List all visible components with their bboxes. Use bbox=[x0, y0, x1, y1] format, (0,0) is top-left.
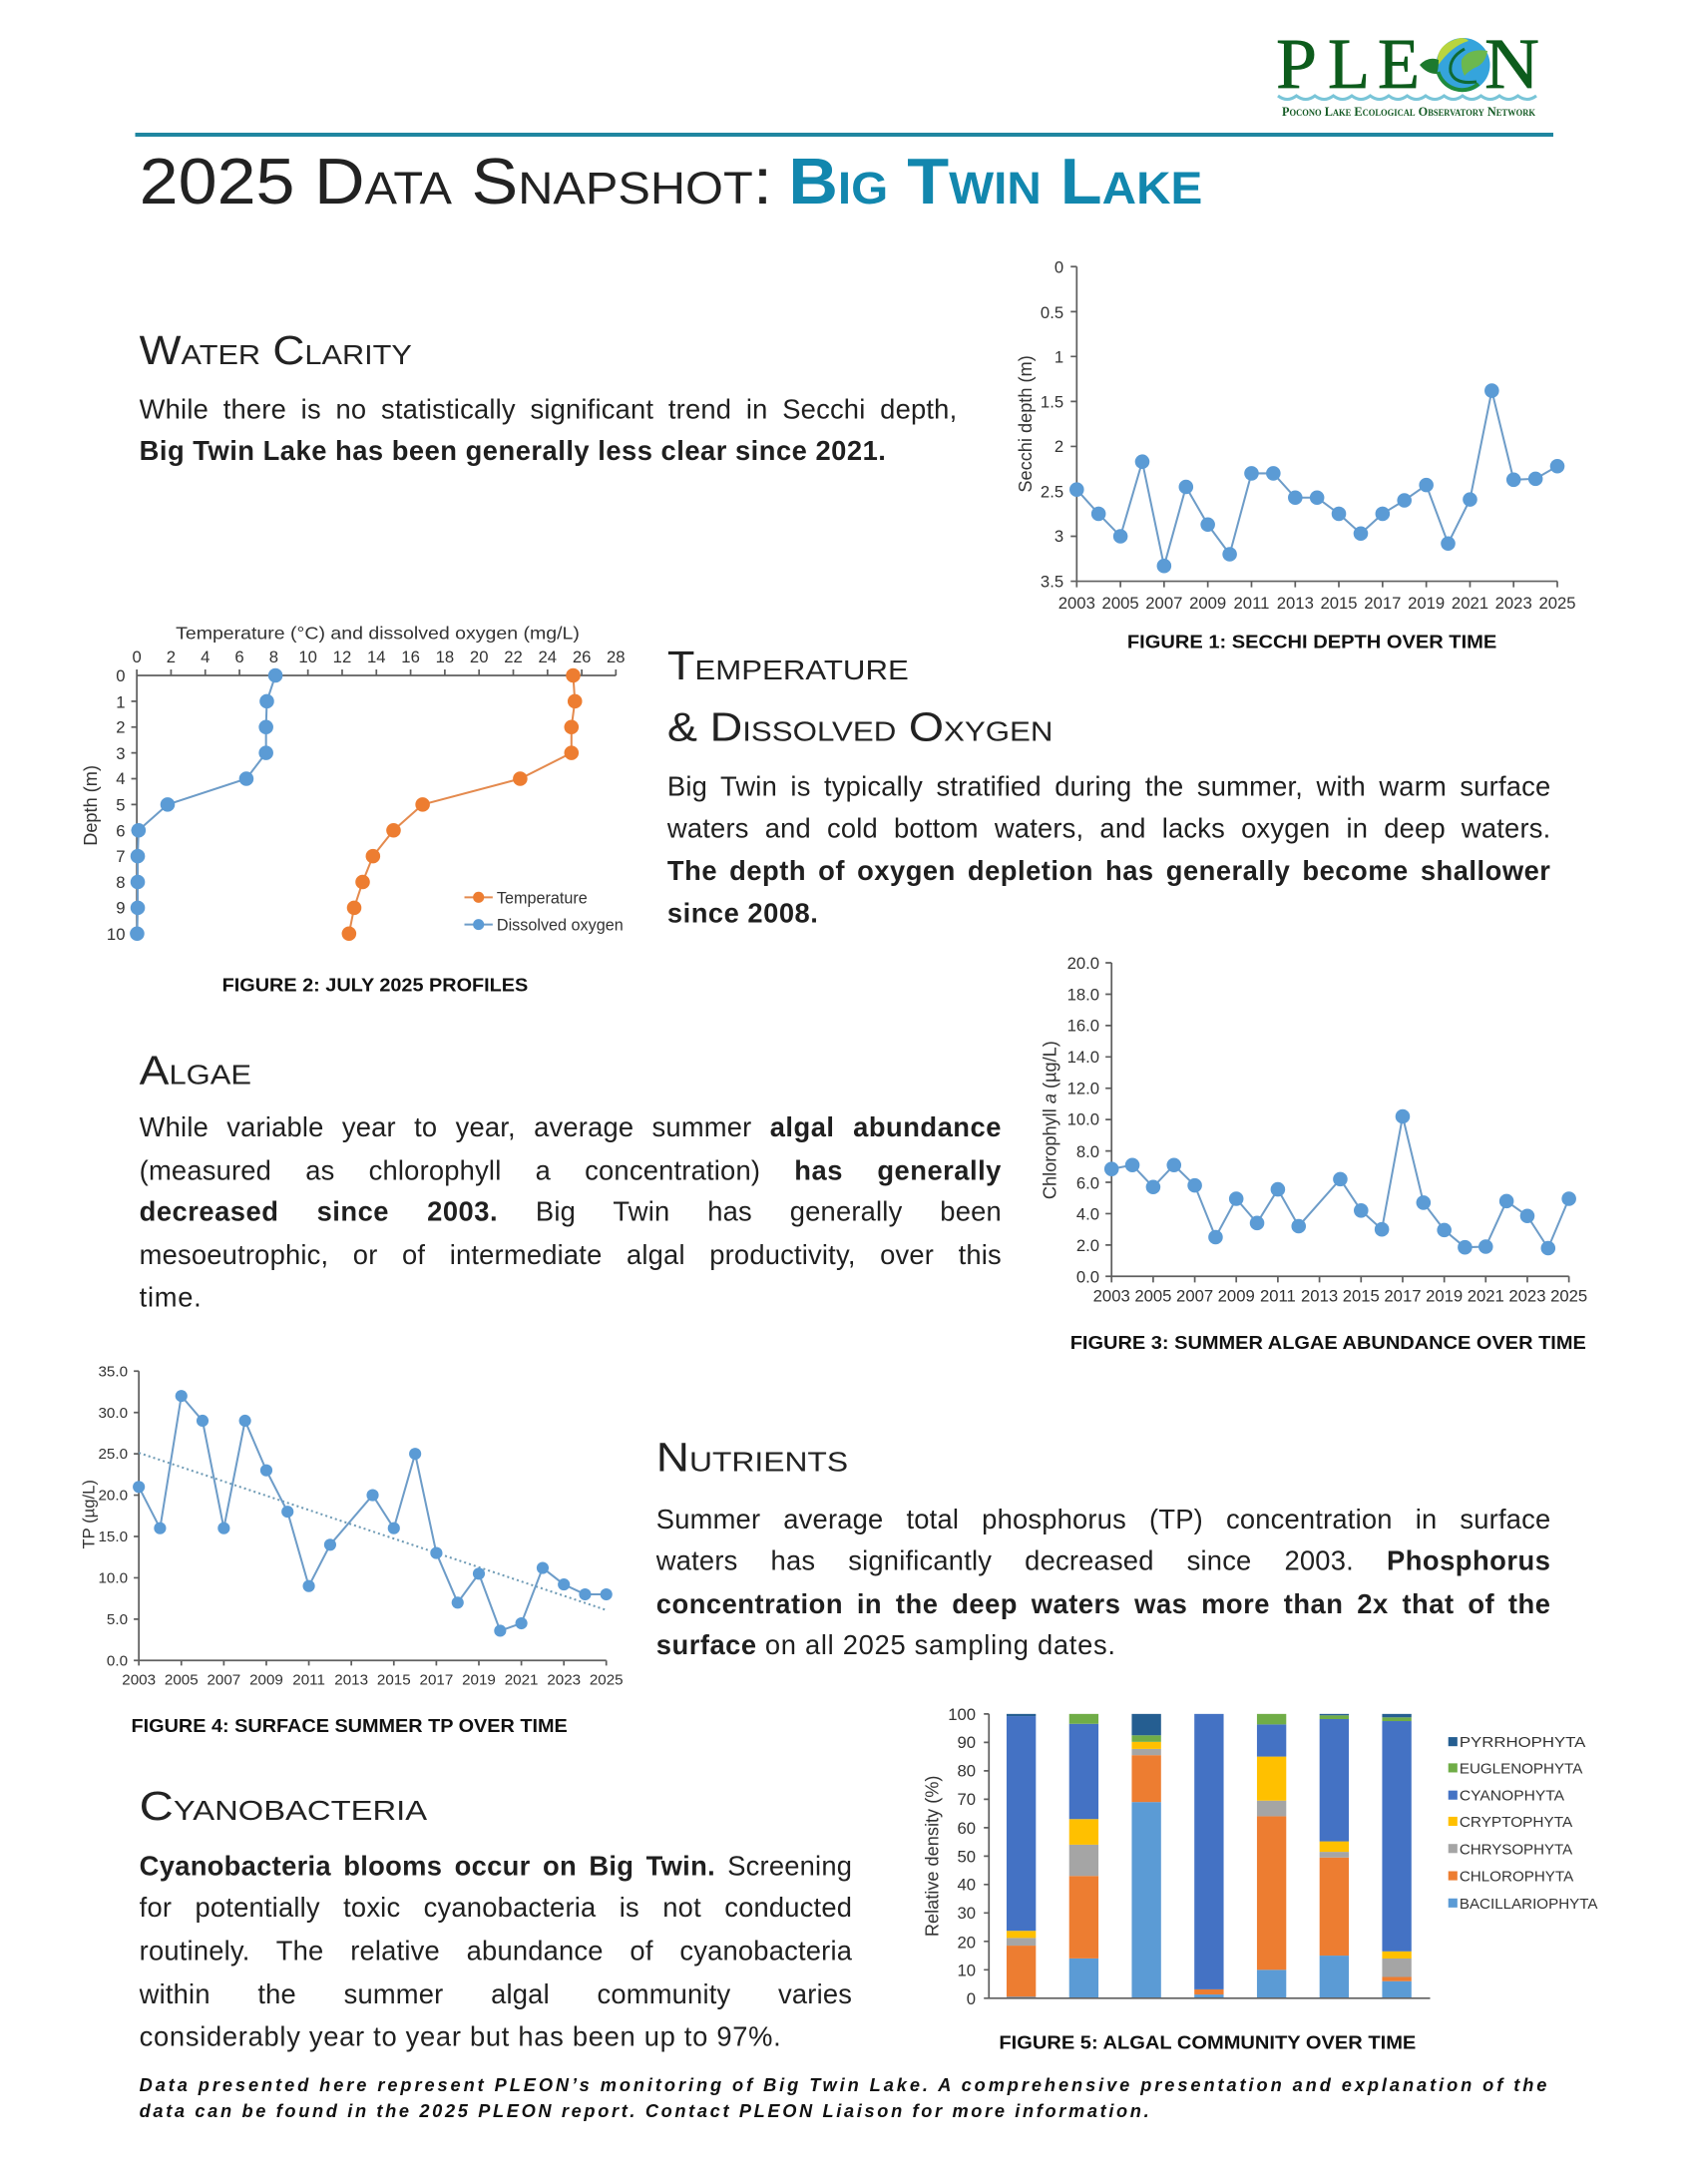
heading: temperature and dissolved oxygen bbox=[667, 643, 1054, 750]
chart: Secchi depth over time: 0 bbox=[1055, 257, 1063, 276]
chart: July 2025 temperature and dissolved oxygen profiles: 6 bbox=[116, 822, 125, 841]
chart: summer algae abundance over time: 20.0 bbox=[1067, 954, 1099, 973]
legend: algal groups: BACILLARIOPHYTA bbox=[1460, 1897, 1598, 1913]
chart: surface summer total phosphorus over time: 5.0 bbox=[107, 1611, 128, 1628]
title: 2025 Data Snapshot: bbox=[140, 145, 772, 218]
chart: summer algae abundance over time: 2005 bbox=[1134, 1287, 1171, 1306]
chart: July 2025 temperature and dissolved oxygen profiles: 10 bbox=[298, 648, 317, 666]
chart: summer algae abundance over time: 2011 bbox=[1260, 1287, 1296, 1306]
chart: surface summer total phosphorus over time: 2019 bbox=[462, 1672, 496, 1689]
bar 3 bbox=[1131, 1714, 1161, 1998]
text block: algae: mesoeutrophic, or of intermediate algal productivity, over this bbox=[140, 1240, 1002, 1270]
chart: algal community stacked bars: 10 bbox=[958, 1962, 976, 1980]
chart: algal community stacked bars: 60 bbox=[958, 1819, 976, 1838]
chart: Secchi depth over time bbox=[1016, 257, 1576, 613]
chart: July 2025 temperature and dissolved oxygen profiles: 0 bbox=[132, 648, 142, 666]
bar 6 bbox=[1320, 1714, 1349, 1998]
heading: temperature and dissolved oxygen: & Dissolved Oxygen bbox=[667, 704, 1054, 750]
chart: algal community stacked bars: 80 bbox=[958, 1762, 976, 1780]
chart: July 2025 temperature and dissolved oxygen profiles: Temperature (°C) and dissolved oxygen (mg/L) bbox=[176, 624, 580, 644]
text block: cyanobacteria: within the summer algal community varies bbox=[140, 1978, 852, 2008]
legend: algal groups: CYANOPHYTA bbox=[1460, 1789, 1564, 1805]
chart: July 2025 temperature and dissolved oxygen profiles: 2 bbox=[167, 648, 176, 666]
chart: summer algae abundance over time: 2007 bbox=[1176, 1287, 1213, 1306]
chart: Secchi depth over time: 2007 bbox=[1145, 594, 1182, 613]
caption: figure 3: FIGURE 3: SUMMER ALGAE ABUNDANCE OVER TIME bbox=[1070, 1332, 1586, 1353]
chart: July 2025 temperature and dissolved oxygen profiles: 9 bbox=[116, 899, 125, 918]
logo: PLEON: Pocono Lake Ecological Observatory Network bbox=[1282, 104, 1535, 119]
text block: water clarity: While there is no statistically significant trend in Secchi depth, bbox=[140, 394, 957, 424]
chart: Secchi depth over time: 2 bbox=[1055, 437, 1063, 456]
chart: July 2025 temperature and dissolved oxygen profiles: 1 bbox=[116, 692, 125, 711]
chart: Secchi depth over time: 2013 bbox=[1277, 594, 1314, 613]
text block: cyanobacteria: considerably year to year but has been up to 97%. bbox=[140, 2021, 781, 2051]
legend: algal groups: EUGLENOPHYTA bbox=[1460, 1761, 1583, 1777]
text block: temperature and dissolved oxygen: since 2008. bbox=[667, 898, 818, 928]
chart: surface summer total phosphorus over time: 30.0 bbox=[98, 1405, 128, 1422]
chart: Secchi depth over time: 2003 bbox=[1058, 594, 1095, 613]
heading: temperature and dissolved oxygen: Temperature bbox=[667, 643, 909, 688]
chart: July 2025 temperature and dissolved oxygen profiles: 0 bbox=[116, 666, 125, 685]
chart: summer algae abundance over time: 4.0 bbox=[1076, 1205, 1099, 1224]
caption: figure 2: FIGURE 2: JULY 2025 PROFILES bbox=[222, 974, 528, 995]
legend: algal groups: CHRYSOPHYTA bbox=[1460, 1842, 1572, 1858]
text block: temperature and dissolved oxygen bbox=[667, 771, 1550, 928]
chart: July 2025 temperature and dissolved oxygen profiles: 18 bbox=[436, 648, 454, 666]
chart: algal community stacked bars: 30 bbox=[958, 1904, 976, 1923]
chart: July 2025 temperature and dissolved oxygen profiles: 22 bbox=[504, 648, 523, 666]
chart: July 2025 temperature and dissolved oxygen profiles: 6 bbox=[234, 648, 244, 666]
text block: algae: decreased since 2003. Big Twin has generally been bbox=[140, 1196, 1002, 1227]
text block: algae: (measured as chlorophyll a concentration) has generally bbox=[140, 1155, 1002, 1185]
logo: PLEON bbox=[1276, 24, 1539, 119]
heading: water clarity: Water Clarity bbox=[140, 327, 412, 373]
chart: Secchi depth over time: 3.5 bbox=[1041, 573, 1063, 592]
chart: surface summer total phosphorus over time: 2011 bbox=[292, 1672, 325, 1689]
chart: summer algae abundance over time: 2019 bbox=[1426, 1287, 1463, 1306]
chart: surface summer total phosphorus over time: 2013 bbox=[334, 1672, 368, 1689]
text block: cyanobacteria: routinely. The relative abundance of cyanobacteria bbox=[140, 1936, 852, 1966]
text block: water clarity bbox=[140, 394, 957, 466]
chart: surface summer total phosphorus over time: 20.0 bbox=[98, 1488, 128, 1505]
chart: July 2025 temperature and dissolved oxygen profiles: 14 bbox=[367, 648, 386, 666]
legend: algal groups: CRYPTOPHYTA bbox=[1460, 1815, 1572, 1831]
text block: nutrients: concentration in the deep waters was more than 2x that of the bbox=[656, 1589, 1550, 1619]
chart: summer algae abundance over time: 6.0 bbox=[1076, 1173, 1099, 1192]
logo: PLEON: N bbox=[1484, 24, 1539, 104]
chart: Secchi depth over time: 2025 bbox=[1538, 594, 1576, 613]
text block: cyanobacteria: Cyanobacteria blooms occur on Big Twin. Screening bbox=[140, 1851, 852, 1881]
caption: figure 1: FIGURE 1: SECCHI DEPTH OVER TIME bbox=[1127, 632, 1496, 653]
bar 5 bbox=[1257, 1714, 1286, 1998]
heading: algae: Algae bbox=[140, 1047, 251, 1092]
chart: July 2025 temperature and dissolved oxygen profiles: Dissolved oxygen bbox=[497, 917, 624, 935]
chart: summer algae abundance over time: 16.0 bbox=[1067, 1017, 1099, 1036]
chart: surface summer total phosphorus over time: 10.0 bbox=[98, 1569, 128, 1586]
chart: summer algae abundance over time: 2003 bbox=[1093, 1287, 1130, 1306]
chart: algal community stacked bars: 90 bbox=[958, 1733, 976, 1752]
chart: Secchi depth over time: 1 bbox=[1055, 347, 1063, 366]
chart: algal community stacked bars: 0 bbox=[967, 1989, 976, 2008]
chart: Secchi depth over time: 2005 bbox=[1102, 594, 1139, 613]
chart: July 2025 temperature and dissolved oxygen profiles: 4 bbox=[201, 648, 210, 666]
bar 7 bbox=[1382, 1714, 1412, 1998]
heading: nutrients: Nutrients bbox=[656, 1434, 848, 1480]
text block: temperature and dissolved oxygen: The depth of oxygen depletion has generally become shallower bbox=[667, 855, 1550, 886]
chart: July 2025 temperature and dissolved oxygen profiles: 16 bbox=[401, 648, 420, 666]
chart: July 2025 temperature and dissolved oxygen profiles: Depth (m) bbox=[81, 765, 101, 846]
chart: summer algae abundance over time: Chlorophyll a (µg/L) bbox=[1041, 1041, 1060, 1199]
chart: July 2025 temperature and dissolved oxygen profiles: 12 bbox=[333, 648, 351, 666]
chart: Secchi depth over time: 2009 bbox=[1189, 594, 1226, 613]
chart: Secchi depth over time: 2021 bbox=[1452, 594, 1488, 613]
chart: summer algae abundance over time: 8.0 bbox=[1076, 1142, 1099, 1161]
chart: surface summer total phosphorus over time: 2005 bbox=[165, 1672, 199, 1689]
text block: nutrients: waters has significantly decreased since 2003. Phosphorus bbox=[656, 1545, 1550, 1575]
chart: summer algae abundance over time: 2025 bbox=[1550, 1287, 1587, 1306]
legend: algal groups bbox=[1449, 1735, 1598, 1913]
chart: July 2025 temperature and dissolved oxygen profiles: 4 bbox=[116, 769, 125, 788]
chart: surface summer total phosphorus over time: 35.0 bbox=[98, 1363, 128, 1380]
chart: surface summer total phosphorus over time: 2009 bbox=[249, 1672, 283, 1689]
chart: July 2025 temperature and dissolved oxygen profiles: 8 bbox=[269, 648, 278, 666]
caption: figure 5: FIGURE 5: ALGAL COMMUNITY OVER TIME bbox=[999, 2031, 1416, 2052]
chart: July 2025 temperature and dissolved oxygen profiles: 2 bbox=[116, 718, 125, 737]
chart: surface summer total phosphorus over time: 25.0 bbox=[98, 1446, 128, 1463]
chart: summer algae abundance over time: 2023 bbox=[1508, 1287, 1546, 1306]
text block: nutrients: Summer average total phosphorus (TP) concentration in surface bbox=[656, 1505, 1550, 1534]
chart: surface summer total phosphorus over time: TP (µg/L) bbox=[80, 1480, 99, 1549]
bar 4 bbox=[1194, 1714, 1224, 1998]
chart: summer algae abundance over time: 10.0 bbox=[1067, 1110, 1099, 1129]
legend: algal groups: CHLOROPHYTA bbox=[1460, 1870, 1573, 1886]
chart: Secchi depth over time: 2015 bbox=[1320, 594, 1358, 613]
chart: July 2025 temperature and dissolved oxygen profiles: 8 bbox=[116, 873, 125, 892]
text block: cyanobacteria bbox=[140, 1851, 852, 2051]
text block: algae: time. bbox=[140, 1282, 202, 1313]
chart: surface summer total phosphorus over time: 2003 bbox=[122, 1672, 156, 1689]
chart: summer algae abundance over time: 14.0 bbox=[1067, 1048, 1099, 1067]
chart: Secchi depth over time: 1.5 bbox=[1041, 393, 1063, 412]
chart: algal community stacked bars bbox=[923, 1705, 1598, 2008]
chart: algal community stacked bars: 100 bbox=[948, 1705, 976, 1724]
text block: nutrients: surface on all 2025 sampling dates. bbox=[656, 1630, 1116, 1660]
chart: algal community stacked bars: Relative density (%) bbox=[923, 1776, 943, 1937]
chart: Secchi depth over time: 3 bbox=[1055, 527, 1063, 546]
logo: PLEON: L bbox=[1328, 24, 1370, 104]
caption: figure 4: FIGURE 4: SURFACE SUMMER TP OVER TIME bbox=[132, 1715, 568, 1736]
chart: Secchi depth over time: 2019 bbox=[1408, 594, 1445, 613]
chart: summer algae abundance over time: 12.0 bbox=[1067, 1079, 1099, 1097]
chart: Secchi depth over time: 2011 bbox=[1234, 594, 1269, 613]
footer note: Data presented here represent PLEON’s monitoring of Big Twin Lake. A comprehensive presentation and explanation of the bbox=[140, 2075, 1546, 2095]
chart: Secchi depth over time: 2023 bbox=[1495, 594, 1532, 613]
chart: surface summer total phosphorus over time: 2015 bbox=[377, 1672, 411, 1689]
chart: summer algae abundance over time: 2013 bbox=[1301, 1287, 1338, 1306]
chart: summer algae abundance over time: 0.0 bbox=[1076, 1267, 1099, 1286]
text block: water clarity: Big Twin Lake has been generally less clear since 2021. bbox=[140, 436, 886, 466]
chart: July 2025 temperature and dissolved oxygen profiles bbox=[81, 624, 626, 944]
chart: summer algae abundance over time bbox=[1041, 954, 1587, 1306]
chart: summer algae abundance over time: 2017 bbox=[1384, 1287, 1422, 1306]
chart: summer algae abundance over time: 2009 bbox=[1218, 1287, 1255, 1306]
logo: PLEON: E bbox=[1378, 24, 1420, 104]
chart: surface summer total phosphorus over time: 2007 bbox=[207, 1672, 240, 1689]
chart: surface summer total phosphorus over time: 15.0 bbox=[98, 1529, 128, 1545]
text block: algae bbox=[140, 1112, 1002, 1313]
chart: algal community stacked bars: 70 bbox=[958, 1790, 976, 1809]
chart: July 2025 temperature and dissolved oxygen profiles: 3 bbox=[116, 744, 125, 763]
text block: cyanobacteria: for potentially toxic cyanobacteria is not conducted bbox=[140, 1892, 852, 1923]
logo: PLEON: P bbox=[1276, 24, 1317, 104]
chart: July 2025 temperature and dissolved oxygen profiles: 28 bbox=[607, 648, 626, 666]
heading: cyanobacteria: Cyanobacteria bbox=[140, 1783, 427, 1829]
chart: algal community stacked bars: 50 bbox=[958, 1847, 976, 1866]
text block: nutrients bbox=[656, 1505, 1550, 1660]
chart: surface summer total phosphorus over time: 2017 bbox=[420, 1672, 453, 1689]
bar 1 bbox=[1007, 1714, 1036, 1998]
chart: July 2025 temperature and dissolved oxygen profiles: 10 bbox=[107, 925, 125, 944]
chart: algal community stacked bars: 20 bbox=[958, 1933, 976, 1952]
chart: July 2025 temperature and dissolved oxygen profiles: 5 bbox=[116, 795, 125, 814]
chart: Secchi depth over time: 2017 bbox=[1364, 594, 1401, 613]
title bbox=[140, 145, 1202, 218]
bar 2 bbox=[1069, 1714, 1098, 1998]
chart: summer algae abundance over time: 18.0 bbox=[1067, 985, 1099, 1004]
text block: algae: While variable year to year, average summer algal abundance bbox=[140, 1112, 1002, 1142]
legend: algal groups: PYRRHOPHYTA bbox=[1460, 1735, 1586, 1751]
chart: July 2025 temperature and dissolved oxygen profiles: 26 bbox=[573, 648, 591, 666]
chart: surface summer total phosphorus over time: 2025 bbox=[590, 1672, 624, 1689]
footer note: data can be found in the 2025 PLEON report. Contact PLEON Liaison for more information. bbox=[140, 2101, 1149, 2121]
header rule bbox=[136, 133, 1553, 137]
chart: surface summer total phosphorus over time: 2023 bbox=[547, 1672, 581, 1689]
title: Big Twin Lake bbox=[788, 145, 1202, 218]
chart: Secchi depth over time: Secchi depth (m) bbox=[1016, 355, 1036, 493]
chart: July 2025 temperature and dissolved oxygen profiles: Temperature bbox=[497, 889, 588, 907]
chart: summer algae abundance over time: 2015 bbox=[1343, 1287, 1380, 1306]
chart: Secchi depth over time: 2.5 bbox=[1041, 483, 1063, 502]
footer note bbox=[140, 2075, 1546, 2121]
chart: July 2025 temperature and dissolved oxygen profiles: 20 bbox=[470, 648, 488, 666]
chart: summer algae abundance over time: 2.0 bbox=[1076, 1236, 1099, 1255]
chart: July 2025 temperature and dissolved oxygen profiles: 7 bbox=[116, 847, 125, 866]
chart: July 2025 temperature and dissolved oxygen profiles: 24 bbox=[539, 648, 557, 666]
text block: temperature and dissolved oxygen: waters and cold bottom waters, and lacks oxygen in deep waters. bbox=[667, 813, 1550, 843]
chart: surface summer total phosphorus over time bbox=[80, 1363, 624, 1689]
chart: algal community stacked bars: 40 bbox=[958, 1876, 976, 1895]
chart: surface summer total phosphorus over time: 2021 bbox=[505, 1672, 538, 1689]
text block: temperature and dissolved oxygen: Big Twin is typically stratified during the summer, with warm surface bbox=[667, 771, 1550, 801]
chart: surface summer total phosphorus over time: 0.0 bbox=[107, 1652, 128, 1669]
chart: Secchi depth over time: 0.5 bbox=[1041, 303, 1063, 322]
chart: summer algae abundance over time: 2021 bbox=[1468, 1287, 1504, 1306]
